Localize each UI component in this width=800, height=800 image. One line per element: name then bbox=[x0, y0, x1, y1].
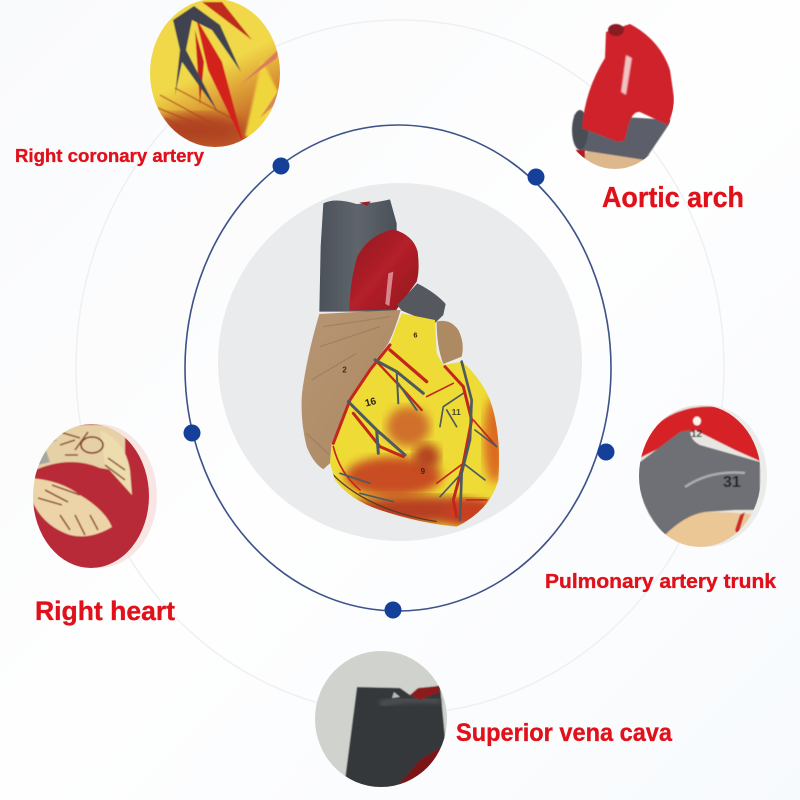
callout: pulmonary artery trunk bbox=[545, 402, 777, 593]
detail image: right heart bbox=[33, 424, 149, 568]
callout: superior vena cava bbox=[314, 650, 673, 795]
numbers on heart: 16 bbox=[364, 396, 378, 410]
detail image: right coronary artery bbox=[147, 0, 282, 150]
navy ring bbox=[185, 125, 611, 611]
label: pulmonary artery trunk: Pulmonary artery trunk bbox=[545, 571, 777, 593]
pulmonary trunk bbox=[397, 283, 446, 324]
callout: right heart bbox=[26, 424, 175, 626]
detail image: superior vena cava bbox=[314, 650, 450, 795]
detail image: aortic arch bbox=[572, 24, 675, 172]
coronary veins bbox=[340, 360, 497, 520]
orange shading bbox=[332, 397, 506, 527]
numbers on heart: 9 bbox=[421, 467, 426, 476]
yellow ventricle bbox=[330, 313, 499, 527]
superior vena cava bbox=[319, 199, 397, 312]
numbers on heart: 6 bbox=[413, 330, 417, 339]
callout: right coronary artery bbox=[15, 0, 282, 166]
detail image: pulmonary artery trunk: 31 bbox=[723, 474, 741, 491]
pale outer ring bbox=[76, 20, 724, 714]
callout: aortic arch bbox=[572, 24, 744, 214]
left atrium bbox=[437, 321, 463, 364]
numbers on heart bbox=[342, 330, 461, 476]
numbers on heart: 11 bbox=[452, 407, 461, 417]
numbers on heart: 2 bbox=[342, 366, 347, 375]
inner grey disc bbox=[218, 183, 582, 541]
coronary arteries bbox=[333, 345, 497, 517]
right atrium and ventricle bbox=[302, 310, 401, 469]
pale halo behind pulmonary detail bbox=[645, 405, 767, 547]
label: aortic arch: Aortic arch bbox=[602, 182, 744, 214]
label: right heart: Right heart bbox=[35, 596, 175, 626]
detail image: pulmonary artery trunk: 12 bbox=[691, 429, 703, 440]
detail image: pulmonary artery trunk bbox=[639, 405, 761, 547]
ring dots bbox=[184, 158, 614, 618]
label: superior vena cava: Superior vena cava bbox=[456, 719, 673, 747]
pale halo behind right heart detail bbox=[41, 424, 157, 568]
label: right coronary artery: Right coronary artery bbox=[15, 146, 204, 166]
central heart model bbox=[302, 199, 506, 527]
aorta bbox=[349, 229, 419, 311]
